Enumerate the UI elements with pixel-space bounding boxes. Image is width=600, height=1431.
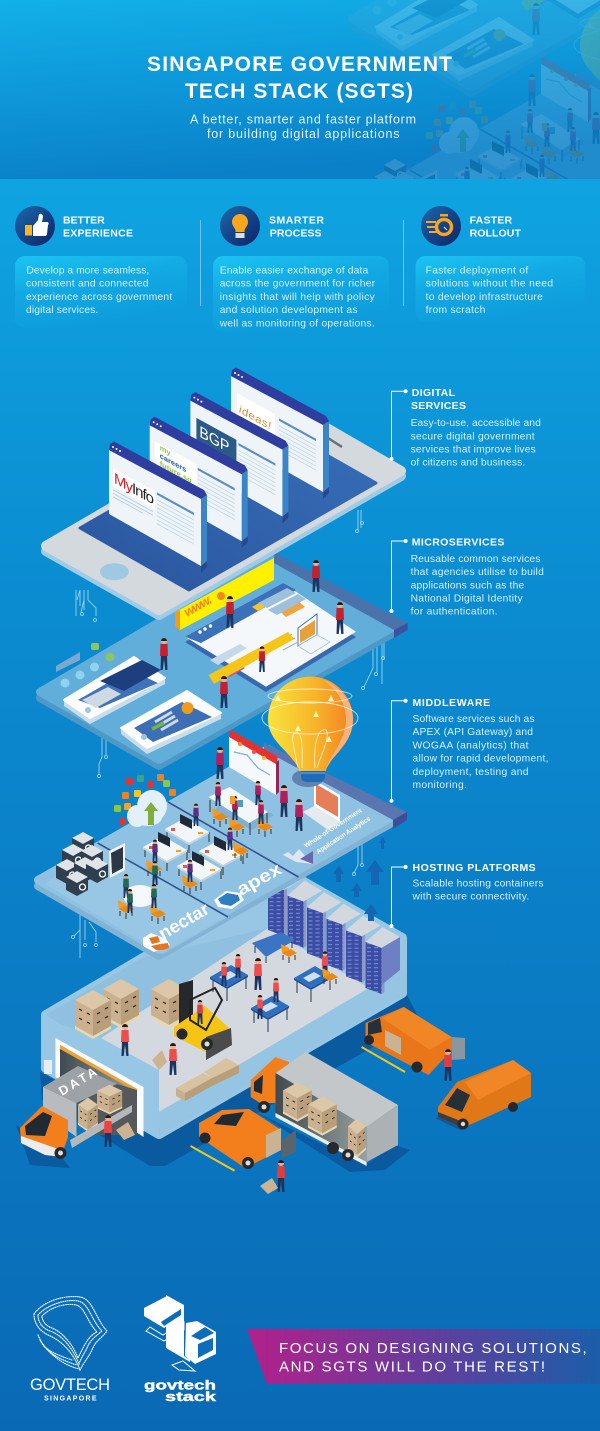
subtitle: A better, smarter and faster platform — [190, 112, 416, 126]
text block: Scalable hosting containers — [412, 878, 544, 890]
window: mycareersfuture: future.sg — [160, 459, 192, 485]
text block: that agencies utilise to build — [411, 567, 544, 578]
van: rear — [362, 1007, 465, 1081]
text block: solutions without the need — [426, 279, 553, 290]
text block: to develop infrastructure — [426, 292, 543, 303]
crate stacks — [75, 979, 187, 1039]
van: side — [435, 1060, 540, 1130]
floor — [101, 928, 369, 1112]
window: ideas: ideas! — [239, 402, 272, 433]
heading — [63, 214, 133, 240]
circuit lines — [72, 510, 384, 958]
text block: WOGAA (analytics) that — [412, 740, 529, 752]
window: ideas — [231, 368, 329, 499]
text block: deployment, testing and — [412, 767, 529, 778]
title: TECH STACK (SGTS) — [185, 80, 413, 103]
round table — [118, 861, 166, 924]
speaker — [328, 438, 342, 447]
truck: data — [16, 1064, 137, 1168]
heading: FASTER — [470, 214, 513, 226]
shadow — [40, 995, 420, 1166]
callout: digital services — [390, 387, 541, 468]
icon: light bulb — [220, 206, 260, 246]
leader line — [390, 865, 408, 928]
heading: EXPERIENCE — [63, 228, 133, 240]
text block: Software services such as — [412, 714, 534, 725]
text block: APEX (API Gateway) and — [412, 727, 533, 738]
text block — [219, 266, 376, 330]
phone top — [46, 405, 401, 610]
text block: consistent and connected — [26, 279, 149, 290]
text block: with secure connectivity. — [412, 892, 529, 902]
text block: across the government for richer — [220, 279, 376, 290]
text block: experience across government — [26, 292, 172, 303]
logo: govtech singapore — [30, 1297, 110, 1403]
loading door — [44, 1038, 144, 1137]
icon: stacked blocks — [144, 1295, 216, 1371]
heading: SERVICES — [411, 400, 466, 412]
singapore label: SINGAPORE — [44, 1396, 97, 1403]
callout: middleware — [390, 697, 548, 803]
banner text: AND SGTS WILL DO THE REST! — [279, 1358, 545, 1376]
text block: Enable easier exchange of data — [220, 266, 368, 276]
floor boxes — [176, 1058, 239, 1101]
heading: PROCESS — [270, 228, 322, 240]
subtitle: for building digital applications — [207, 127, 400, 141]
text block: services that improve lives — [411, 444, 536, 456]
window: bgp: BGP — [199, 422, 229, 457]
middleware slab — [38, 730, 407, 956]
stack label — [144, 1378, 216, 1404]
heading: BETTER — [63, 214, 105, 226]
card background — [15, 256, 187, 328]
heading — [470, 214, 521, 240]
icon: dotted ring — [34, 1297, 107, 1370]
apex logo — [214, 891, 244, 909]
text block: Develop a more seamless, — [26, 266, 149, 276]
www banner — [176, 558, 274, 630]
desks and staff — [121, 932, 338, 1075]
tablet — [109, 843, 125, 878]
text block: monitoring. — [412, 780, 467, 791]
heading: MICROSERVICES — [412, 536, 504, 548]
app icons — [56, 643, 114, 688]
divider lines — [200, 220, 404, 306]
apex label: apex — [233, 859, 285, 899]
leader line — [390, 539, 408, 613]
window: mycareersfuture — [150, 417, 248, 548]
data label: DATA — [56, 1064, 100, 1099]
articulated truck — [251, 1052, 410, 1172]
forklift — [174, 980, 232, 1060]
phone: card app — [64, 657, 165, 724]
logo: govtech stack — [144, 1295, 216, 1404]
analysts and laptop — [280, 780, 340, 831]
microservices slab — [40, 552, 408, 766]
text block: National Digital Identity — [411, 594, 523, 604]
analytics whiteboard — [229, 730, 279, 795]
wogaa label: Whole-of-Government — [303, 807, 364, 850]
www banner: www. — [181, 592, 214, 620]
text block: Reusable common services — [411, 554, 540, 565]
window: myinfo: MyInfo — [114, 470, 154, 509]
panel: hosting platform illustration — [16, 869, 540, 1194]
server racks — [268, 869, 400, 994]
text block: digital services. — [26, 305, 98, 316]
heading — [411, 387, 466, 412]
text block: Faster deployment of — [426, 266, 528, 276]
stack label: govtech — [144, 1378, 216, 1392]
home button — [100, 563, 129, 580]
window: bgp — [190, 392, 288, 524]
window: mycareersfuture: careers — [160, 451, 187, 475]
text block — [411, 418, 541, 468]
wogaa logo — [283, 849, 313, 864]
callout: microservices — [390, 536, 544, 618]
browser panel — [185, 583, 356, 692]
icon: stopwatch — [421, 206, 461, 246]
leader line — [390, 389, 408, 461]
title — [147, 53, 452, 103]
nectar label: nectar — [155, 899, 213, 943]
heading: DIGITAL — [412, 387, 456, 399]
stack label: stack — [165, 1390, 216, 1404]
text block — [412, 878, 544, 902]
heading: ROLLOUT — [470, 228, 521, 240]
panel: middle layers — [30, 368, 600, 1404]
text block: allow for rapid development, — [412, 754, 548, 764]
text block — [411, 554, 544, 618]
card background — [416, 256, 586, 322]
header band — [0, 0, 600, 179]
phone slab — [46, 368, 401, 615]
arrows up — [333, 837, 386, 921]
cloud and apps — [114, 774, 176, 827]
banner text — [279, 1340, 587, 1376]
callout banner — [247, 1329, 600, 1384]
van: front — [191, 1109, 296, 1194]
govtech label: GOVTECH — [30, 1376, 110, 1394]
wogaa label: Application Analytics — [315, 815, 372, 856]
callout: hosting platforms — [390, 862, 544, 928]
text block — [426, 266, 553, 316]
staff — [160, 560, 344, 708]
subtitle — [190, 112, 416, 141]
workstations — [143, 804, 249, 894]
text block: well as monitoring of operations. — [219, 318, 375, 330]
text block: insights that will help with policy — [220, 292, 376, 303]
ruler — [209, 632, 294, 684]
text block — [26, 266, 172, 316]
phone: stats app — [121, 691, 221, 754]
text block: and solution development as — [220, 305, 358, 316]
phone side — [46, 410, 401, 615]
faded header illustration — [348, 0, 600, 179]
phone screen — [80, 421, 376, 590]
leader line — [390, 699, 408, 803]
card background — [213, 256, 389, 332]
nectar logo — [143, 933, 170, 952]
text block: applications such as the — [411, 580, 524, 592]
title: SINGAPORE GOVERNMENT — [147, 53, 452, 76]
panel: faster rollout — [416, 206, 586, 322]
text block: secure digital government — [411, 431, 535, 442]
banner text: FOCUS ON DESIGNING SOLUTIONS, — [279, 1340, 587, 1357]
text block: Easy-to-use, accessible and — [411, 418, 541, 429]
bulb base — [292, 762, 325, 787]
window: myinfo — [109, 442, 207, 573]
icon: thumbs up — [15, 206, 55, 246]
panel: better experience — [15, 206, 187, 328]
hosting shell — [46, 873, 402, 1134]
heading: SMARTER — [269, 214, 324, 226]
text block: from scratch — [426, 305, 486, 316]
bulb — [262, 677, 358, 771]
text block: of citizens and business. — [411, 458, 525, 468]
text block: for authentication. — [411, 606, 498, 618]
meeting table — [209, 747, 274, 837]
heading: MIDDLEWARE — [412, 697, 490, 709]
window: mycareersfuture: my — [160, 443, 171, 458]
cube stack — [56, 832, 108, 896]
heading: HOSTING PLATFORMS — [412, 862, 536, 874]
panel: smarter process — [213, 206, 389, 332]
text block — [412, 714, 548, 791]
heading — [269, 214, 324, 240]
